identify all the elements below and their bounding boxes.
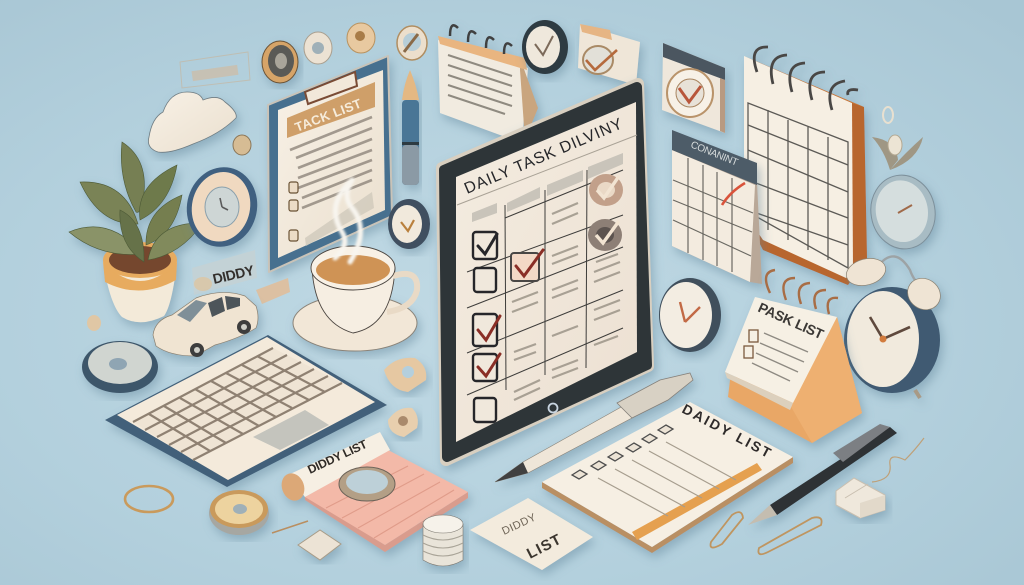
panel: clipboard task list [268,56,392,272]
icon: notepad top [438,25,538,143]
tick marks [478,234,543,376]
icon: gear lower [388,408,418,437]
icon: compass [82,341,158,393]
label: diddy: DIDDY [500,511,538,538]
icon: thread [872,438,924,482]
icon: plant [69,142,203,322]
icon: list bullets [289,182,298,241]
icon: pen right [748,424,897,525]
table header row [472,153,623,222]
icon: small gold tag [87,315,101,331]
label: diddy [192,250,257,295]
icon: pen upright [402,70,419,185]
keys [133,348,342,460]
icon: cloud [148,92,236,152]
scroll: diddy list: DIDDY LIST [305,437,370,477]
icon: spiral rings [754,47,858,110]
icon: small seal [233,135,251,155]
text block: clipboard lines [290,117,372,208]
icon: clock top [522,20,568,74]
icon: small box [298,530,341,560]
panel: tablet [442,84,648,460]
panel: pink note pad [278,432,468,552]
label: diddy: DIDDY [211,262,256,287]
icon: wall clock right [659,278,721,352]
scroll: diddy list [278,432,390,504]
icon: wood clip [256,278,290,304]
icon: spiral rings [766,270,838,314]
panel: alarm clock [843,254,947,398]
checkboxes [473,232,497,422]
heading: daily task: DAILY TASK DILVINY [462,115,625,198]
icon: checkmark note [578,24,640,85]
home button [548,404,558,412]
icon: car [153,292,258,357]
icon: steam [335,180,361,262]
icon: clock far right [865,170,941,254]
text block: lines [752,333,808,381]
panel: desk calendar [672,130,762,284]
icon: coin [339,467,395,501]
heading: task list label [287,82,375,138]
heading: pask list: PASK LIST [756,299,827,342]
icon: eraser [836,478,885,518]
label: list: LIST [524,531,564,563]
icon: bullets [744,330,758,358]
icon: faint plan sketch top left [180,52,250,88]
text block: lines [326,466,454,538]
panel: list card [470,498,593,570]
icon: coffee cup and saucer [293,180,417,351]
icon: leaves far right [872,107,923,170]
checkboxes [572,425,673,479]
clip [305,72,357,104]
cell scribbles [512,203,620,400]
panel: open notebook daily list [542,401,793,553]
panel: desk flip calendar [725,270,862,443]
icon: wall clock left [179,161,265,253]
icon: gear top [384,358,426,392]
icon: pen center [495,373,693,482]
icon: small clock center [388,199,430,249]
highlighted checkbox [511,253,539,281]
text block: lines [598,442,736,516]
icon: small dial top left 1 [262,41,298,83]
icon: paperclips [710,512,822,554]
status marks [588,174,623,251]
panel: wall calendar large [744,47,867,285]
icon: coin stack [423,515,463,566]
icon: small dial top left 3 [347,23,375,53]
icon: ring top [397,26,427,60]
trackpad [253,410,329,450]
heading: daidy list: DAIDY LIST [680,401,774,461]
icon: gold dial [209,490,269,535]
icon: leaves [69,142,203,262]
icon: small dial top left 2 [304,32,332,64]
icon: small pin [272,521,308,533]
icon: calendar clock [662,43,725,133]
icon: gold ring [125,486,173,512]
table grid [467,170,623,395]
panel: desk calendar: CONANINT [689,140,739,169]
heading: task list label: TACK LIST [293,96,363,135]
panel: keyboard [105,335,387,487]
lower bar [305,192,374,246]
